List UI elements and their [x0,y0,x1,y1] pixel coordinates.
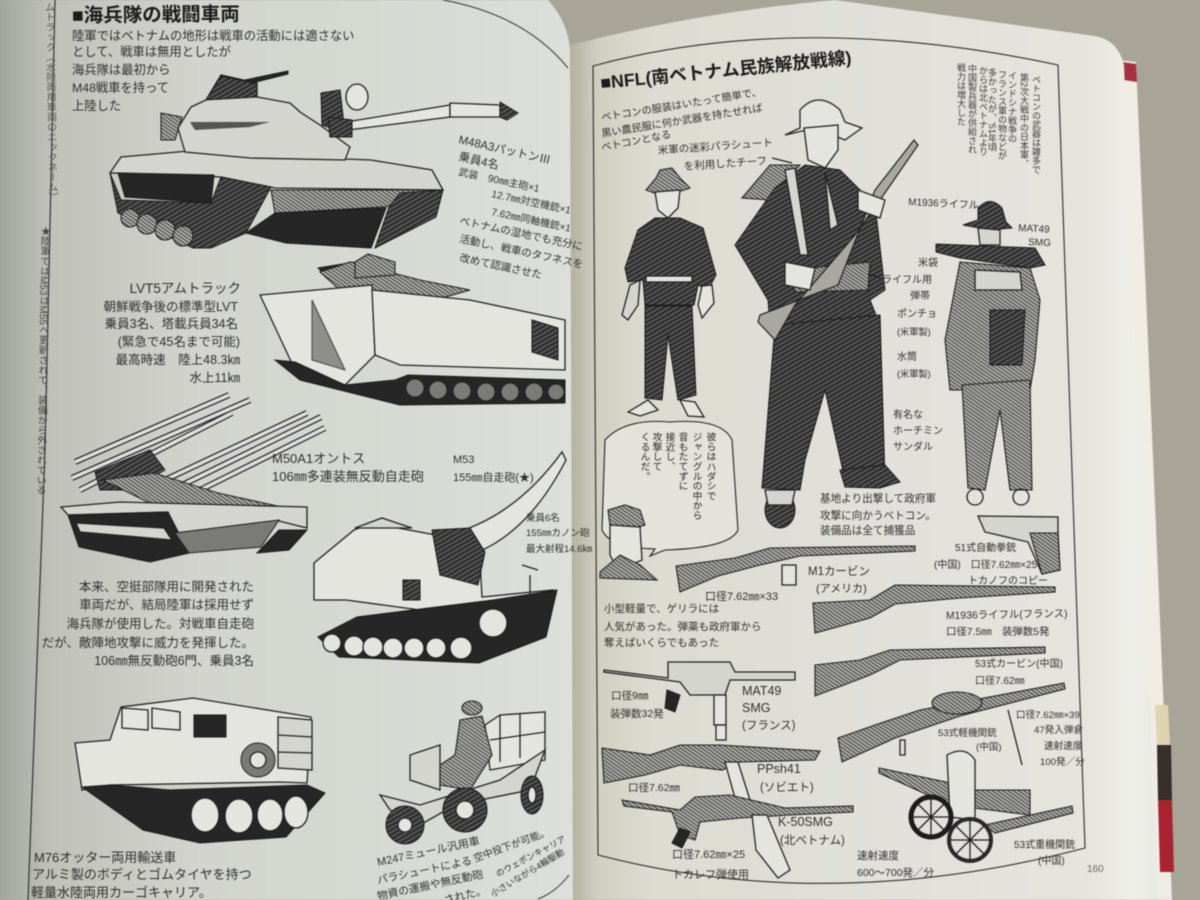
label: PPsh41: (ソビエト) [760,781,814,794]
label: LVT5 specs: 水上11㎞ [190,371,240,385]
labels: rear-view guerrilla: サンダル [893,440,933,453]
vertical note: インドシナ戦争の [1007,71,1017,143]
label: M76 Otter: アルミ製のボディとゴムタイヤを持つ [32,867,252,882]
label: Ontos: 106㎜多連装無反動自走砲 [272,469,424,484]
label: LVT5 specs: 乗員3名、塔載兵員34名 [105,316,238,331]
vertical note: 多かったが、'51年頃 [987,67,997,153]
margin note: vertical text: ムトラック（水陸両用車両のニックネーム） [42,2,58,202]
text block: M1 carbine note: 奪えばいくらでもあった [604,636,719,649]
vertical note: ベトコンの武器は雑多で [1031,75,1041,174]
label: M1936 rifle specs [946,608,1068,638]
label: Ontos [272,451,424,484]
text block: M1 carbine note: 小型軽量で、ゲリラには [604,602,719,615]
labels: rear-view guerrilla: (米軍製) [897,326,931,337]
label: M247 Mule: のウェポンキャリア [494,834,567,879]
label: M53: 155㎜自走砲(★) [453,471,534,484]
label: M1 carbine: (アメリカ) [816,582,867,595]
illustration: M247 Mule [380,701,545,844]
callout: speech bubble: 音もたてずに [676,431,688,491]
page frame [593,38,1085,883]
label: Type 53 LMG [938,709,1085,768]
label: K-50 SMG: トカレフ弾使用 [672,868,749,881]
label: pistol: トカノフのコピー [968,575,1048,587]
labels: rear-view guerrilla [893,223,1051,453]
text block: Ontos notes [42,579,254,668]
label: M53 specs: 最大射程14.6㎞ [526,543,592,555]
illustration: LVT5 [260,254,565,405]
label: M53: M53 [453,454,474,466]
illustration: M1936 rifle [813,585,1055,633]
label: chief: を利用したチーフ [683,155,767,173]
text block: Ontos notes: 海兵隊が使用した。対戦車自走砲 [66,616,254,631]
label: MAT49: MAT49 [742,684,781,698]
label: M53 specs: 乗員6名 [526,512,560,524]
callout: speech bubble [602,421,738,556]
intro text: 上陸した [72,99,121,113]
label: M247 Mule: パラシュートによる [376,854,473,887]
label: Ontos: M50A1オントス [272,451,365,466]
label: pistol [934,541,1048,587]
text block: Ontos notes: 本来、空挺部隊用に開発された [79,579,254,594]
illustration: PPsh41 [602,745,820,800]
label: K-50 SMG: 口径7.62㎜×25 [672,848,745,861]
label: M48A3 specs: ベトナムの湿地でも充分に [458,214,584,253]
label: M48A3 specs: 7.62㎜同軸機銃×1 [490,205,573,235]
illustration: K-50 SMG [622,795,853,878]
vertical note: 戦力は増大した [956,62,966,126]
illustration: officer head [600,505,657,580]
illustration: MAT49 SMG [604,662,795,740]
label: pistol: (中国) 口径7.62㎜×25 [934,558,1038,571]
text block: Ontos notes: だが、敵陣地攻撃に威力を発揮した。 [42,635,254,650]
label: Type 53 carbine [975,657,1063,687]
label: M76 Otter [31,850,252,900]
intro text: ベトコンの服装はいたって簡単で、 [600,85,762,124]
callout: speech bubble: くるんだ。 [638,432,650,481]
label: M1936 rifle specs: 口径7.5㎜ 装弾数5発 [946,625,1050,638]
labels: rear-view guerrilla: 水筒 [897,350,917,363]
label: M53 [453,454,534,484]
label: rifle ammo belt [868,274,932,302]
illustration: M50A1 Ontos [61,395,325,562]
illustration: Type 53 carbine [815,647,1045,696]
labels: rear-view guerrilla: ポンチョ [897,308,937,320]
label: M247 Mule [376,825,567,900]
label: Type 53 LMG: (中国) [976,741,1002,753]
intro text: として、戦車は無用としたが [72,44,231,59]
label: M48A3 specs: 12.7㎜対空機銃×1 [490,187,573,217]
text block: Ontos notes: 車両だが、結局陸軍は採用せず [79,597,254,612]
label: MAT49: 口径9㎜ [611,689,649,702]
illustration: rear-view guerrilla [936,202,1045,505]
label: M48A3 specs: 乗員4名 [457,149,500,172]
text block: base caption: 基地より出撃して政府軍 [820,492,936,505]
callout: speech bubble: ジャングルの中から [690,432,702,520]
panel: left page [0,0,592,900]
heading: NFL: ■NFL(南ベトナム民族解放戦線) [599,47,852,93]
labels: rear-view guerrilla: ホーチミン [893,425,943,437]
vertical note: 第2次大戦中の日本軍、 [1019,72,1029,168]
label: Type 53 HMG: 53式重機関銃 [1014,838,1075,851]
page number: 160 [1087,864,1104,875]
label: PPsh41 [628,762,814,794]
text block: base caption: 装備品は全て捕獲品 [820,524,915,537]
label: rifle ammo belt: ライフル用 [882,274,932,286]
label: M247 Mule: 小さいながら4輪駆動 [488,846,566,899]
label: K-50 SMG [672,815,845,881]
vertical note: 中国製兵器が供給され [967,63,977,154]
label: pistol: 51式自動拳銃 [955,541,1016,554]
intro text: ベトコンとなる [600,129,672,154]
label: LVT5 specs: LVT5アムトラック [130,281,241,296]
label: M1 carbine: 口径7.62㎜×33 [705,590,778,603]
illustration: M1 carbine [676,546,915,592]
illustration: M76 Otter [75,698,325,843]
label: M1 carbine: M1カービン [808,565,870,578]
intro text: 黒い農民服に何か武器を持たせれば [600,101,763,140]
label: Type 53 HMG [857,838,1075,879]
labels: rear-view guerrilla: 有名な [893,408,923,421]
label: PPsh41: PPsh41 [757,762,801,776]
label: M1936 rifle specs: M1936ライフル(フランス) [946,608,1068,622]
text block: M1 carbine note: 人気があった。弾薬も政府軍から [604,620,762,633]
label: M247 Mule: M247ミュール汎用車 [376,834,481,869]
label: LVT5 specs [104,281,241,385]
label: MAT49: 装弾数32発 [610,707,664,720]
label: LVT5 specs: 朝鮮戦争後の標準型LVT [104,299,238,314]
label: PPsh41: 口径7.62㎜ [628,781,680,794]
label: M53 specs: 155㎜カノン砲 [526,527,590,539]
label: M76 Otter: 軽量水陸両用カーゴキャリア。 [31,885,212,900]
intro text: 陸軍ではベトナムの地形は戦車の活動には適さない [72,29,354,43]
labels: rear-view guerrilla: 米袋 [918,256,938,269]
illustration: M53 self-propelled gun [314,452,566,663]
intro text [600,85,763,154]
margin note: vertical text [34,2,58,495]
label: LVT5 specs: 最高時速 陸上48.3㎞ [116,352,240,367]
callout: speech bubble: 攻撃して [650,431,662,471]
label: Type 53 HMG: 600〜700発／分 [857,866,935,879]
illustration: central guerrilla [735,100,918,528]
label: M76 Otter: M76オッター両用輸送車 [34,850,176,865]
labels: rear-view guerrilla: (米軍製) [897,368,931,379]
vertical note: フランス軍の物などが [997,70,1007,160]
label: MAT49 [610,684,796,732]
illustration: left guerrilla [622,168,716,417]
vertical note [956,62,1041,174]
book cover edge [1118,60,1174,900]
text block: base caption: 攻撃に向かうベトコン。 [820,509,936,522]
label: M48A3 specs [457,133,584,281]
label: Type 53 LMG: 速射速度 [1044,740,1083,752]
label: LVT5 specs: (緊急で45名まで可能) [118,334,240,349]
text block: M1 carbine note [604,602,762,649]
label: M1936 rifle: M1936ライフル [908,196,979,212]
vertical note: からは北ベトナムより [978,66,988,156]
label: M48A3 specs: 活動し、戦車のタフネスを [458,232,584,271]
illustration: Type 53 heavy machine gun [879,751,1073,861]
label: K-50 SMG: K-50SMG [778,815,833,829]
labels: rear-view guerrilla: MAT49 [1018,223,1050,236]
label: Type 53 carbine: 53式カービン(中国) [975,657,1063,670]
callout: speech bubble: 彼らはハダシで [704,431,716,501]
label: rifle ammo belt: 弾帯 [910,289,930,302]
intro text: M48戦車を持って [72,80,169,95]
text block: Ontos notes: 106㎜無反動砲6門、乗員3名 [94,653,254,668]
panel: right page [568,0,1158,900]
label: Type 53 LMG: 口径7.62㎜×39 [1016,709,1080,721]
label: M53 specs [526,512,592,555]
callout: speech bubble: 接近し、 [664,431,675,471]
label: M247 Mule: 空中投下が可能。 [472,825,551,865]
label: M48A3 specs: M48A3パットンⅢ [457,133,552,167]
label: Type 53 LMG: 100発／分 [1040,756,1085,768]
label: Type 53 LMG: 53式軽機関銃 [938,727,997,739]
label: Type 53 carbine: 口径7.62㎜ [975,674,1024,687]
label: Type 53 HMG: (中国) [1038,854,1065,867]
text block: base caption [820,492,936,537]
label: K-50 SMG: (北ベトナム) [780,834,845,847]
label: chief: 米軍の迷彩パラシュート [657,136,773,157]
label: MAT49: SMG [742,701,770,715]
margin note: vertical text: ★陸軍ではM53はM55へ更新されて、装備から外されている [34,226,50,495]
label: Type 53 HMG: 速射速度 [857,849,899,862]
label: M1 carbine [705,565,870,603]
illustration: M48 tank [110,71,518,248]
label: M48A3 specs: 武装 90㎜主砲×1 [457,165,541,195]
intro text: 海兵隊は最初から [72,62,170,77]
labels: rear-view guerrilla: SMG [1028,237,1051,249]
label: MAT49: (フランス) [742,720,796,732]
heading: marine combat vehicles: ■海兵隊の戦闘車両 [72,4,240,27]
intro text [72,29,354,113]
label: M48A3 specs: 改めて認識させた [458,251,543,281]
label: chief [657,136,792,173]
label: Type 53 LMG: 47発入弾倉 [1034,724,1083,736]
illustration: pistol [978,516,1060,574]
illustration: Type 53 LMG [838,683,1065,765]
